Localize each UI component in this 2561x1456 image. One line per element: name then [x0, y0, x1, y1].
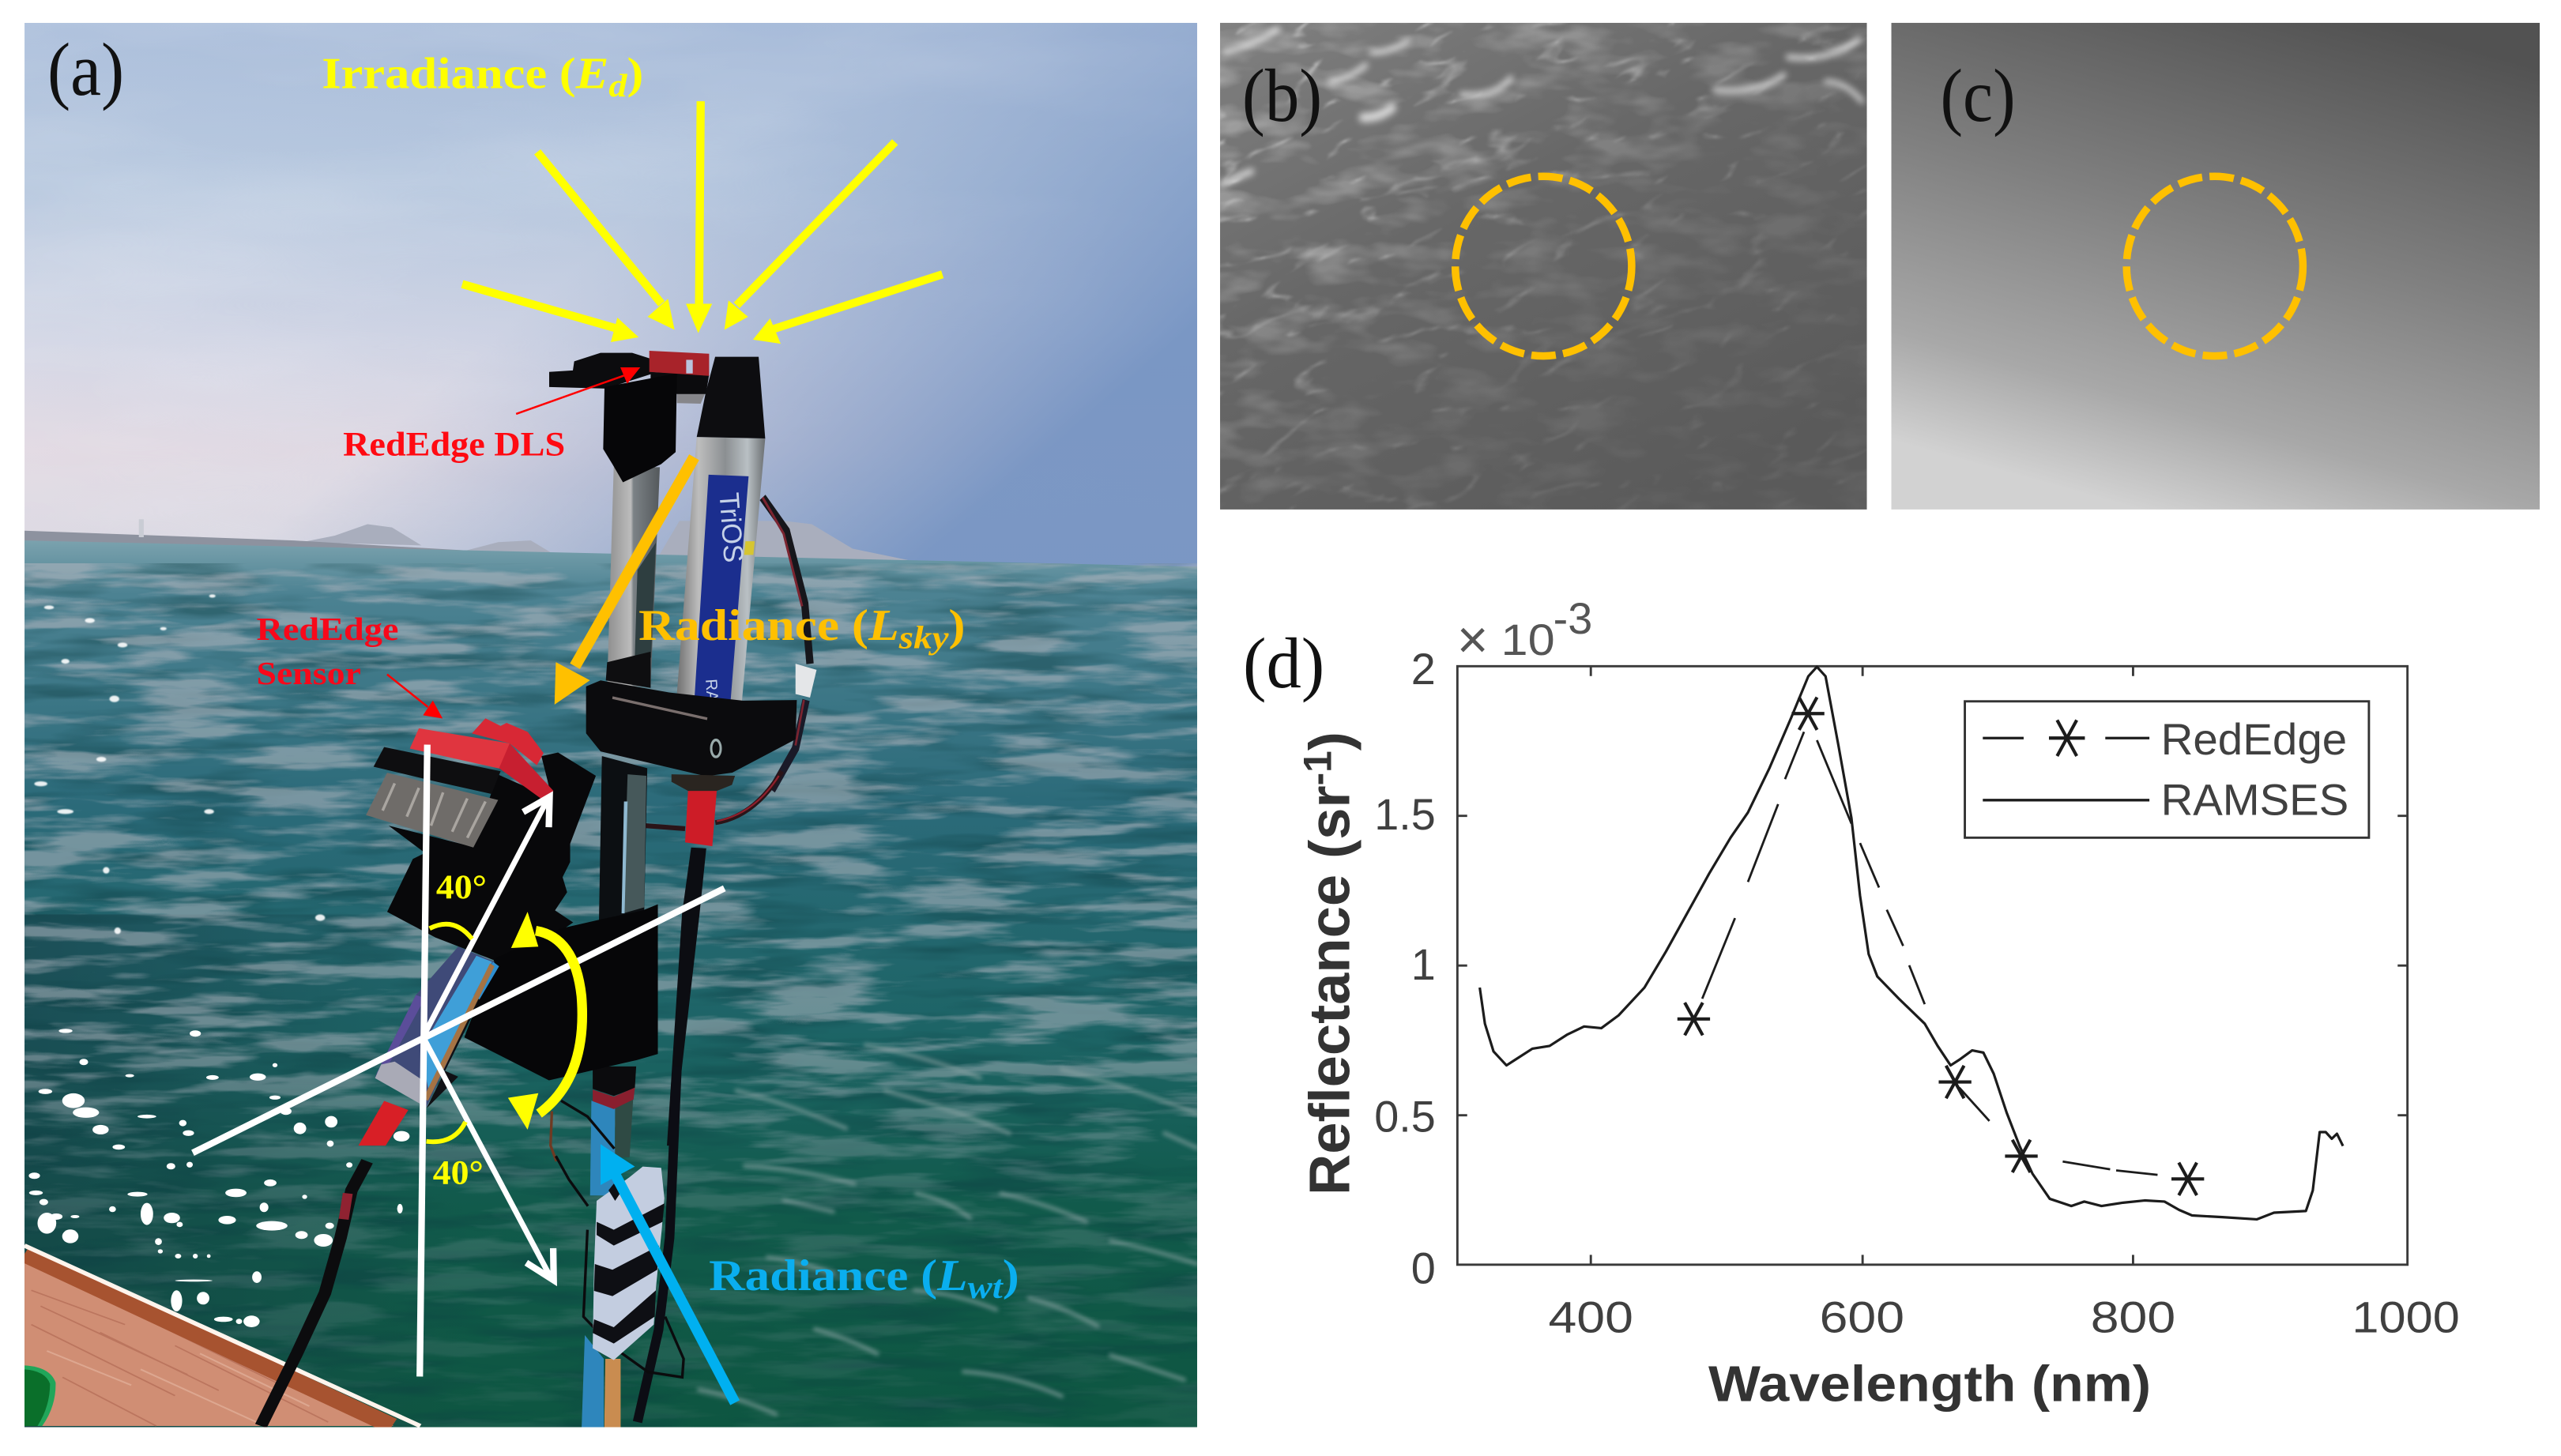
red leader: RedEdge Sensor	[387, 675, 443, 718]
panel: (d) reflectance chart	[1243, 593, 2460, 1412]
x-axis tick labels: 1000	[2352, 1292, 2460, 1342]
label: Irradiance Ed: )	[627, 50, 643, 99]
green bucket	[24, 1365, 55, 1426]
dashed target circle b	[1456, 176, 1632, 356]
panel: (c) grayscale sky reference image	[1892, 23, 2540, 510]
diagonal wave streaks, lower sea	[699, 1045, 1197, 1414]
y-axis tick labels: 1	[1411, 939, 1436, 989]
panel label (b): (b)	[1242, 54, 1322, 137]
y-axis title: )	[1298, 732, 1361, 751]
legend	[1965, 702, 2369, 837]
line: RAMSES spectrum	[1480, 667, 2343, 1219]
RAM text on sensor: RAM	[702, 679, 722, 716]
label: Radiance Lwt: )	[1003, 1251, 1019, 1300]
panel label (a): (a)	[47, 28, 124, 111]
panel: (a) photo of sensor rig at sea	[24, 23, 1197, 1429]
distant islands and breakwater	[24, 519, 908, 560]
arrow: yellow rotation arc	[508, 912, 582, 1130]
legend entry: RAMSES: RAMSES	[2161, 774, 2348, 824]
y-axis title: Reflectance (sr	[1298, 785, 1361, 1195]
geometry lines: vertical and sensor axis	[193, 745, 725, 1376]
arrows: irradiance rays	[462, 101, 943, 344]
TriOS RAMSES radiance sensor tube	[676, 357, 765, 706]
axis multiplier: ×	[1457, 610, 1489, 670]
cables from TriOS sensor	[763, 498, 816, 790]
lower pole segments	[590, 1100, 615, 1195]
arrow: white upward view direction	[423, 797, 550, 1037]
label: RedEdge Sensor: RedEdge	[257, 611, 398, 647]
label: Irradiance Ed: d	[608, 67, 628, 103]
main black cable lower	[638, 1067, 677, 1422]
label: Radiance Lwt: wt	[968, 1269, 1004, 1305]
y-axis tick labels: 0	[1411, 1243, 1436, 1293]
label: Radiance Lwt: Radiance ( L	[709, 1251, 964, 1300]
label: 40 degrees lower: 40°	[433, 1154, 484, 1192]
wooden deck and rail	[24, 1246, 420, 1426]
axis multiplier: -3	[1554, 593, 1592, 643]
red leader: RedEdge DLS	[516, 367, 640, 414]
arrow: sky radiance	[555, 457, 694, 705]
legend entry: RedEdge	[1983, 714, 2347, 764]
legend entry: RedEdge: RedEdge	[2161, 714, 2347, 764]
y-axis tick labels: 0.5	[1374, 1091, 1436, 1141]
sky background	[24, 23, 1197, 570]
axis multiplier: 10	[1501, 615, 1555, 664]
rig top assembly: downwelling light sensor	[549, 351, 709, 688]
vertical poles and lower parts	[599, 756, 781, 1146]
panel: (b) grayscale water image with sun glint	[1043, 0, 2041, 736]
label: RedEdge DLS: RedEdge DLS	[343, 426, 565, 464]
RedEdge multispectral sensor body	[359, 718, 658, 1146]
x-axis tick labels: 800	[2091, 1292, 2175, 1342]
black cable to lower left	[261, 1161, 367, 1426]
small cables	[551, 1112, 556, 1161]
y-axis tick labels: 2	[1411, 644, 1436, 694]
sea background	[24, 540, 1197, 1429]
sun glints on water, upper sea	[34, 594, 325, 934]
line: RedEdge dashed series	[1702, 732, 2157, 1175]
y-axis title: -1	[1296, 751, 1340, 785]
power bank with zebra tape	[593, 1167, 665, 1360]
label: Radiance Lsky: sky	[898, 619, 949, 656]
x-axis tick labels: 600	[1820, 1292, 1904, 1342]
TriOS text on sensor: TriOS	[714, 491, 749, 563]
y-axis tick labels	[1374, 644, 1436, 1293]
label: 40 degrees upper: 40°	[436, 868, 487, 906]
label: Irradiance Ed: Irradiance ( E	[322, 50, 605, 99]
x-axis tick labels: 400	[1548, 1292, 1633, 1342]
label: RedEdge Sensor: Sensor	[257, 655, 361, 691]
x-axis title: Wavelength (nm)	[1708, 1355, 2151, 1412]
panel label (c): (c)	[1941, 54, 2016, 137]
sun glints on water, lower left	[28, 1029, 409, 1327]
arrow: water radiance	[601, 1144, 735, 1402]
y-axis tick labels: 1.5	[1374, 789, 1436, 839]
mount bracket block	[586, 680, 797, 777]
arrow: white downward view direction	[423, 1037, 554, 1280]
axis multiplier	[1457, 593, 1592, 670]
panel label (d): (d)	[1243, 623, 1324, 703]
chart axes box and ticks	[1457, 666, 2408, 1265]
label: Radiance Lsky: )	[948, 601, 966, 650]
dashed target circle c	[2126, 176, 2303, 356]
angle arc: lower 40 degrees	[426, 1122, 465, 1142]
angle arc: upper 40 degrees	[430, 924, 472, 939]
x-axis tick labels	[1548, 1292, 2460, 1342]
label: Radiance Lsky: Radiance ( L	[638, 601, 895, 650]
markers: RedEdge band stars	[1678, 698, 2204, 1195]
